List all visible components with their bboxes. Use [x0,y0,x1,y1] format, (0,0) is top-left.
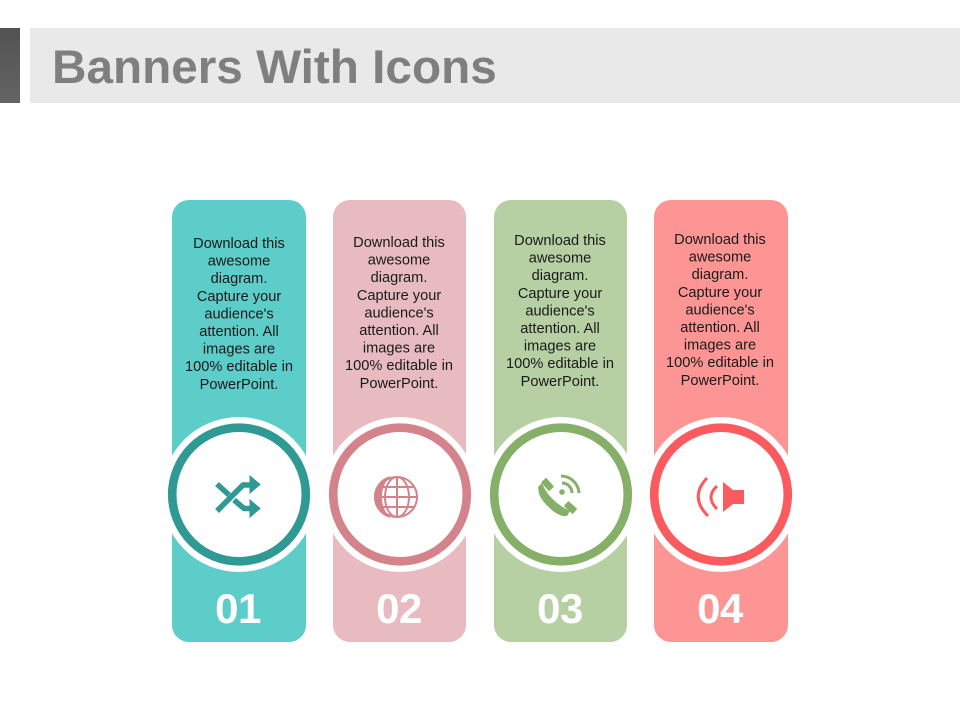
text block 03: Download this [514,233,606,249]
text block 03: images are [524,339,596,355]
number 03: 03 [537,585,583,632]
text block 04: audience's [685,302,755,318]
text block 01: images are [203,342,275,358]
text block 01: Capture your [197,289,281,305]
icon: globe [374,477,417,517]
text block 02 [345,235,453,392]
text block 03: attention. All [520,321,600,337]
text block 01: PowerPoint. [200,377,278,393]
circle badge 02 [322,417,478,572]
panel: 02 [322,200,478,642]
circle badge 04 [644,417,798,572]
number 01: 01 [215,585,261,632]
circle badge 01 [162,417,316,572]
panel: 01 [162,200,316,642]
icon: phone with signal [538,476,579,516]
text block 04: diagram. [692,267,748,283]
text block 04: 100% editable in [666,355,774,371]
icon: speaker [698,478,744,516]
text block 02: images are [363,341,435,357]
text block 01 [185,236,293,393]
text block 02: Download this [353,235,445,251]
panel: 03 [484,200,638,642]
text block 02: audience's [364,305,434,321]
text block 03: 100% editable in [506,356,614,372]
text block 03: awesome [529,251,591,267]
text block 04: Capture your [678,285,762,301]
title banner [30,28,960,103]
text block 01: attention. All [199,324,279,340]
text block 02: diagram. [371,270,427,286]
text block 04 [666,232,774,389]
text block 01: audience's [204,306,274,322]
number 04: 04 [697,585,744,632]
text block 02: awesome [368,253,430,269]
text block 04: Download this [674,232,766,248]
text block 02: PowerPoint. [360,376,438,392]
text block 01: 100% editable in [185,359,293,375]
text block 04: images are [684,338,756,354]
text block 02: attention. All [359,323,439,339]
text block 03: audience's [525,303,595,319]
text block 03: Capture your [518,286,602,302]
title accent bar [0,28,20,103]
text block 04: awesome [689,250,751,266]
text block 01: awesome [208,254,270,270]
panel: 04 [644,200,798,642]
text block 03: PowerPoint. [521,374,599,390]
text block 04: PowerPoint. [681,373,759,389]
number 02: 02 [376,585,422,632]
text block 03: diagram. [532,268,588,284]
icon: shuffle arrows [217,476,260,517]
text block 01: diagram. [211,271,267,287]
title: Banners With Icons [52,41,497,94]
text block 03 [506,233,614,390]
circle badge 03 [484,417,638,572]
text block 04: attention. All [680,320,760,336]
text block 01: Download this [193,236,285,252]
text block 02: Capture your [357,288,441,304]
text block 02: 100% editable in [345,358,453,374]
